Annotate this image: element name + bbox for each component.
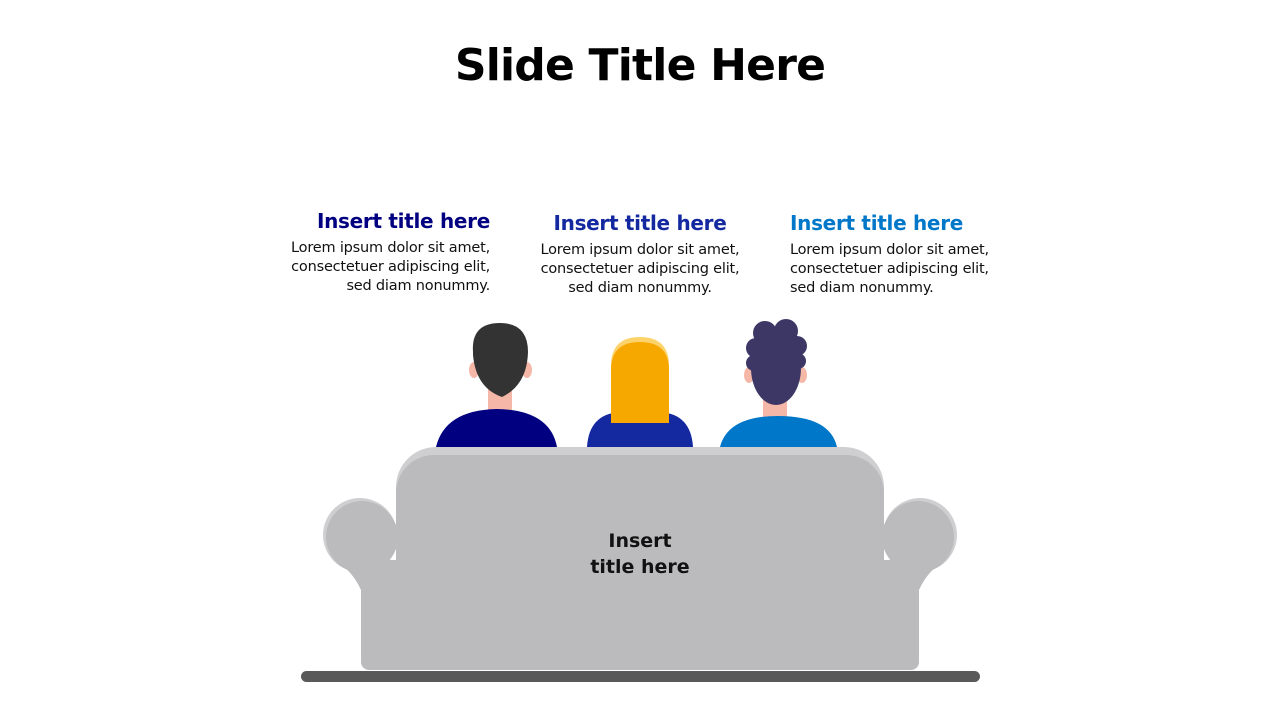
text block: center xyxy=(541,211,739,296)
sofa xyxy=(323,447,957,670)
text block: left: Lorem ipsum dolor sit amet, xyxy=(291,240,490,256)
text block: right xyxy=(790,211,989,296)
text block: center: Lorem ipsum dolor sit amet, xyxy=(541,242,739,258)
text block: center: consectetuer adipiscing elit, xyxy=(541,261,739,277)
text block: right: consectetuer adipiscing elit, xyxy=(790,261,989,277)
text block: left xyxy=(291,209,490,294)
person: left xyxy=(436,323,557,447)
title: Slide Title Here xyxy=(455,40,825,91)
text block: center: Insert title here xyxy=(553,211,727,235)
text block: right: Lorem ipsum dolor sit amet, xyxy=(790,242,989,258)
text: title here xyxy=(590,556,690,578)
text block: left: consectetuer adipiscing elit, xyxy=(291,259,490,275)
text block: right: Insert title here xyxy=(790,211,963,235)
sofa label: Insert xyxy=(608,530,672,552)
text block: left: sed diam nonummy. xyxy=(346,278,490,294)
text block: right: sed diam nonummy. xyxy=(790,280,934,296)
floor bar xyxy=(301,671,980,682)
person: right xyxy=(720,319,837,447)
text block: center: sed diam nonummy. xyxy=(568,280,712,296)
person: center xyxy=(587,337,693,447)
text block: left: Insert title here xyxy=(317,209,490,233)
